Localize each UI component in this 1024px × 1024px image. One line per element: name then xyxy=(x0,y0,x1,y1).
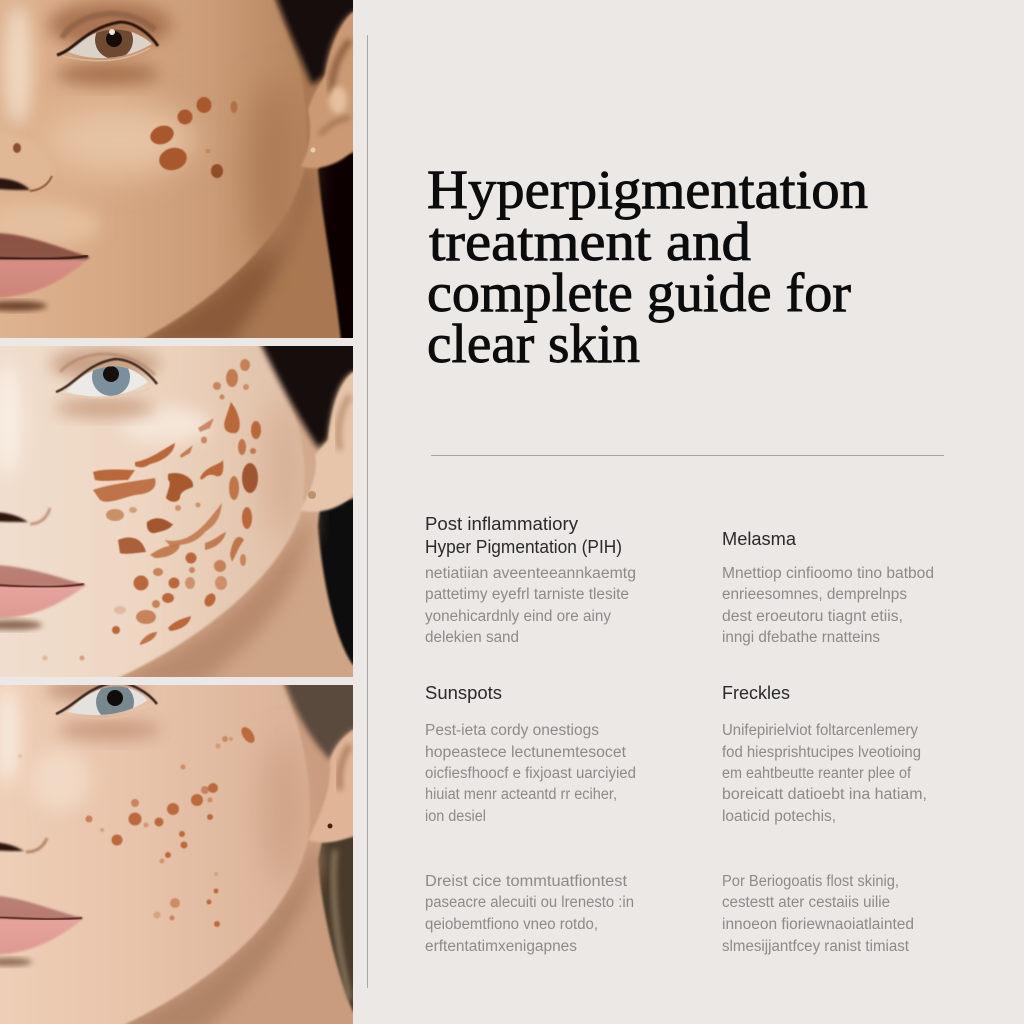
heading: Melasma: Melasma xyxy=(722,529,797,549)
lower hair xyxy=(317,836,353,1013)
hair xyxy=(272,0,353,88)
panel: PIH small spots portrait xyxy=(0,0,370,350)
text block: Sunspots xyxy=(425,683,636,825)
body: PIH: pattetimy eyefrl tarniste tlesite xyxy=(425,586,629,603)
cheek highlight xyxy=(0,365,22,475)
text block: Melasma xyxy=(722,529,934,646)
eye xyxy=(45,680,162,740)
body: Freckles: loaticid potechis, xyxy=(722,808,836,825)
text block: lower left: erftentatimxenigapnes xyxy=(425,938,577,955)
body: Sunspots: oicfiesfhoocf e fixjoast uarciyied xyxy=(425,765,636,782)
cheek and temple shading xyxy=(249,80,301,260)
text block: lower right: innoeon fioriewnaoiatlainted xyxy=(722,916,914,933)
dark hair behind neck xyxy=(316,151,353,338)
neck shadow xyxy=(147,178,312,338)
neck shadow xyxy=(128,846,328,1024)
pigment patches xyxy=(42,359,261,660)
ear xyxy=(301,370,353,513)
body: Freckles: em eahtbeutte reanter plee of xyxy=(722,765,912,782)
hair xyxy=(281,685,353,762)
lips xyxy=(0,233,90,311)
title: Hyperpigmentation xyxy=(427,159,868,220)
lips xyxy=(0,565,86,630)
title divider xyxy=(431,455,944,456)
panel: melasma portrait xyxy=(0,346,353,677)
lips xyxy=(0,895,84,966)
body: Melasma: enrieesomnes, demprelnps xyxy=(722,586,907,603)
cheek highlight xyxy=(0,685,20,785)
panel: sunspots and freckles portrait xyxy=(0,670,370,1024)
title xyxy=(427,159,868,374)
body: Melasma: Mnettiop cinfioomo tino batbod xyxy=(722,565,934,582)
body: Melasma: dest eroeutoru tiagnt etiis, xyxy=(722,608,903,625)
title: treatment and xyxy=(429,211,751,272)
face xyxy=(0,0,307,350)
ear xyxy=(301,10,353,170)
ear xyxy=(308,728,353,844)
text block: PIH xyxy=(425,514,636,646)
eye xyxy=(50,348,160,417)
pigment spots xyxy=(148,97,238,178)
body: Sunspots: hopeastece lectunemtesocet xyxy=(425,744,627,761)
hair xyxy=(257,346,353,451)
heading: PIH: Hyper Pigmentation (PIH) xyxy=(425,537,622,557)
text block: lower left: qeiobemtfiono vneo rotdo, xyxy=(425,916,598,933)
body: Freckles: fod hiesprishtucipes lveotioing xyxy=(722,744,921,761)
nose xyxy=(12,138,47,186)
text block: lower right: Por Beriogoatis flost skinig, xyxy=(722,873,899,890)
face xyxy=(0,330,304,690)
text block: lower left xyxy=(425,873,634,955)
body: PIH xyxy=(425,565,636,646)
body: Sunspots: ion desiel xyxy=(425,808,486,825)
text block: lower right: slmesijjantfcey ranist timiast xyxy=(722,938,910,955)
vertical rule xyxy=(367,35,368,988)
body: PIH: delekien sand xyxy=(425,629,519,646)
body: Sunspots: hiuiat menr acteantd rr eciher, xyxy=(425,786,617,803)
nose xyxy=(26,838,47,852)
body: Melasma xyxy=(722,565,934,646)
heading: PIH xyxy=(425,514,622,557)
body: Freckles xyxy=(722,722,927,825)
body: Freckles: boreicatt datioebt ina hatiam, xyxy=(722,786,927,803)
eye xyxy=(48,1,172,85)
text block: lower left: Dreist cice tommtuatfiontest xyxy=(425,873,628,890)
body: Sunspots xyxy=(425,722,636,825)
neck shadow xyxy=(123,519,322,677)
heading: Sunspots: Sunspots xyxy=(425,683,502,703)
face xyxy=(0,670,310,1024)
body: Freckles: Unifepirielviot foltarcenlemery xyxy=(722,722,918,739)
body: Melasma: inngi dfebathe rnatteins xyxy=(722,629,880,646)
text block: lower left: paseacre alecuiti ou lrenesto :in xyxy=(425,894,634,911)
text block: Freckles xyxy=(722,683,927,825)
heading: Freckles: Freckles xyxy=(722,683,790,703)
title: clear skin xyxy=(427,313,640,374)
freckle clusters xyxy=(18,725,257,927)
dark hair behind neck xyxy=(316,496,353,666)
body: PIH: netiatiian aveenteeannkaemtg xyxy=(425,565,636,582)
body: PIH: yonehicardnly eind ore ainy xyxy=(425,608,611,625)
text block: lower right xyxy=(722,873,914,955)
title: complete guide for xyxy=(427,262,851,323)
heading: PIH: Post inflammatiory xyxy=(425,514,578,534)
body: Sunspots: Pest-ieta cordy onestiogs xyxy=(425,722,599,739)
text block: lower right: cestestt ater cestaiis uilie xyxy=(722,894,890,911)
nose xyxy=(30,508,50,524)
